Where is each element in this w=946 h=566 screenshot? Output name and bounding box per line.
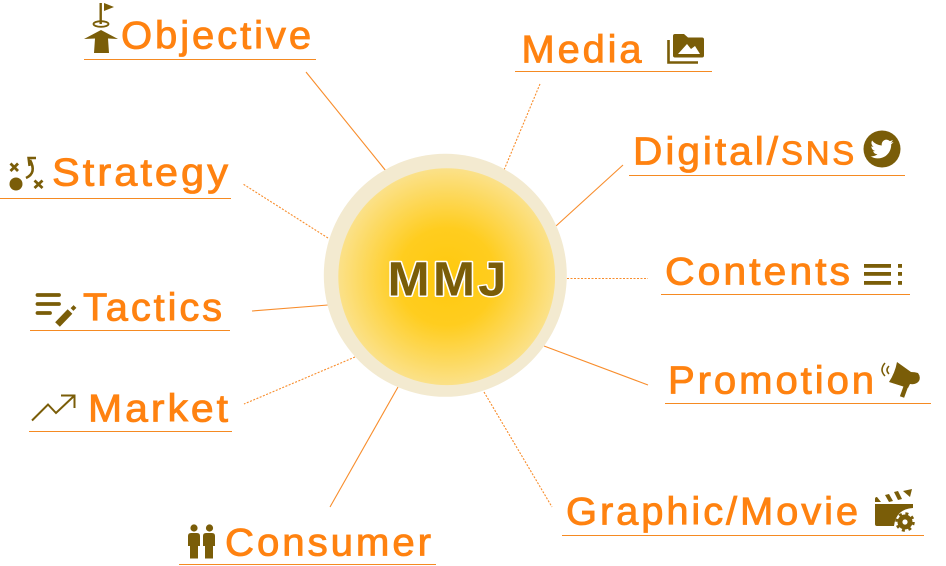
heading: Objective xyxy=(121,14,314,58)
label: Digital/SNS: SNS xyxy=(781,134,857,172)
label: Consumer xyxy=(179,522,436,564)
label: Contents xyxy=(661,250,910,294)
icon: image folder xyxy=(668,34,704,62)
label: Market xyxy=(29,388,232,432)
heading: Market xyxy=(88,388,231,430)
label: Tactics xyxy=(30,286,230,330)
heading: Media xyxy=(522,28,644,72)
icon: list xyxy=(864,264,902,285)
icon: target flag and arrow xyxy=(84,3,118,53)
icon: bird badge xyxy=(864,130,900,168)
central circle: MMJ xyxy=(324,154,567,397)
label: Promotion xyxy=(665,360,931,404)
icon: two people xyxy=(188,524,215,558)
heading: Strategy xyxy=(52,152,231,194)
icon: megaphone xyxy=(882,362,920,397)
icon: clapperboard with gear xyxy=(875,489,914,530)
label: Digital/SNS xyxy=(629,130,905,176)
heading: Digital/ xyxy=(633,130,781,174)
icon: play diagram xyxy=(10,158,42,190)
heading: Tactics xyxy=(83,286,225,330)
icon: notes and pencil xyxy=(38,295,75,324)
icon: trend arrow xyxy=(32,396,74,420)
label: Strategy xyxy=(0,152,231,198)
heading: Promotion xyxy=(668,360,877,402)
heading: Graphic/Movie xyxy=(566,490,861,534)
heading: Contents xyxy=(665,250,853,294)
center label: MMJ xyxy=(388,254,510,306)
label: Media xyxy=(515,28,712,72)
heading: Consumer xyxy=(225,522,434,564)
label: Objective xyxy=(84,3,316,60)
label: Graphic/Movie xyxy=(562,489,924,536)
connector lines xyxy=(243,72,648,507)
